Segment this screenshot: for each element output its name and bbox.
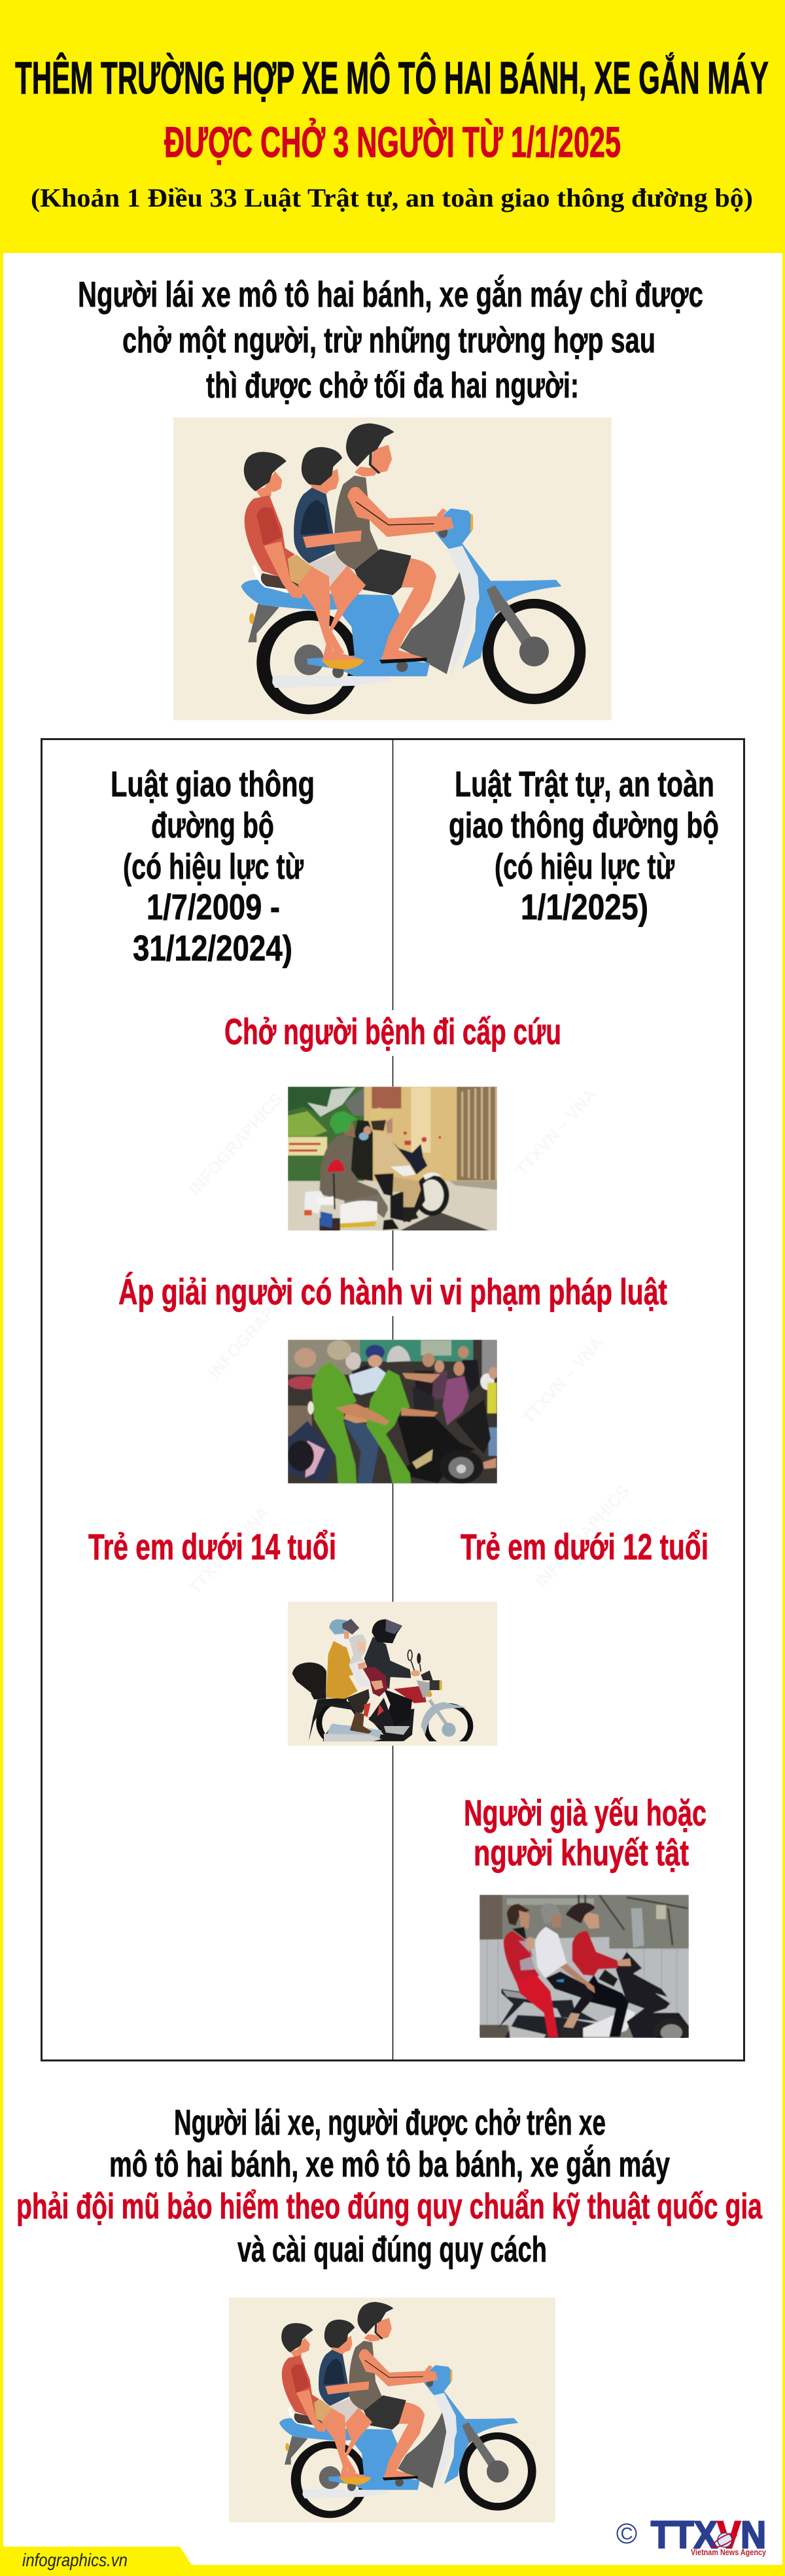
closing text: và cài quai đúng quy cách <box>237 2229 547 2269</box>
illustration: three riders on blue motorbike (top) <box>173 417 612 720</box>
intro text: thì được chở tối đa hai người: <box>206 365 579 405</box>
watermarks: TTXVN – VNA <box>518 1332 607 1428</box>
photo: three adults on scooter <box>480 1895 689 2038</box>
title <box>15 52 769 212</box>
column header: new law <box>449 764 719 927</box>
illustration: family with child on motorbike <box>288 1602 497 1746</box>
intro text <box>78 274 703 405</box>
case heading: emergency patient: Chở người bệnh đi cấp cứu <box>224 1011 561 1052</box>
case heading: elderly or disabled: người khuyết tật <box>474 1832 689 1873</box>
column header: old law <box>111 764 315 968</box>
footer tab <box>0 2547 192 2576</box>
footer site name: infographics.vn <box>22 2550 128 2570</box>
copyright mark <box>618 2524 636 2543</box>
column header: new law: 1/1/2025) <box>521 887 648 927</box>
watermarks: INFOGRAPHICS <box>531 1482 633 1591</box>
case heading: children under 14 (old law): Trẻ em dưới 14 tuổi <box>88 1526 336 1567</box>
illustration: three riders on blue motorbike (bottom) <box>229 2297 555 2522</box>
watermarks: INFOGRAPHICS <box>184 1089 287 1199</box>
copyright mark: C <box>621 2524 633 2543</box>
logo: TTXVN: Vietnam News Agency <box>691 2548 766 2557</box>
photo: police carrying patient <box>288 1087 497 1230</box>
column header: old law: (có hiệu lực từ <box>123 846 304 887</box>
watermarks: TTXVN – VNA <box>512 1084 601 1179</box>
closing text <box>16 2102 762 2269</box>
photo: police escorting offender <box>288 1340 497 1483</box>
watermarks: INFOGRAPHICS <box>204 1272 306 1382</box>
column header: old law: Luật giao thông <box>111 764 315 804</box>
comparison table frame <box>42 739 744 2061</box>
watermarks: TTXVN – VNA <box>184 1502 273 1598</box>
column header: new law: (có hiệu lực từ <box>495 846 674 887</box>
title: (Khoản 1 Điều 33 Luật Trật tự, an toàn giao thông đường bộ) <box>31 183 753 212</box>
watermarks <box>184 1084 633 1598</box>
column header: old law: 31/12/2024) <box>133 928 292 968</box>
case heading: elderly or disabled <box>464 1792 706 1873</box>
column header: old law: đường bộ <box>151 805 274 845</box>
column header: old law: 1/7/2009 - <box>147 887 280 927</box>
logo: TTXVN: TTXVN <box>651 2514 766 2556</box>
